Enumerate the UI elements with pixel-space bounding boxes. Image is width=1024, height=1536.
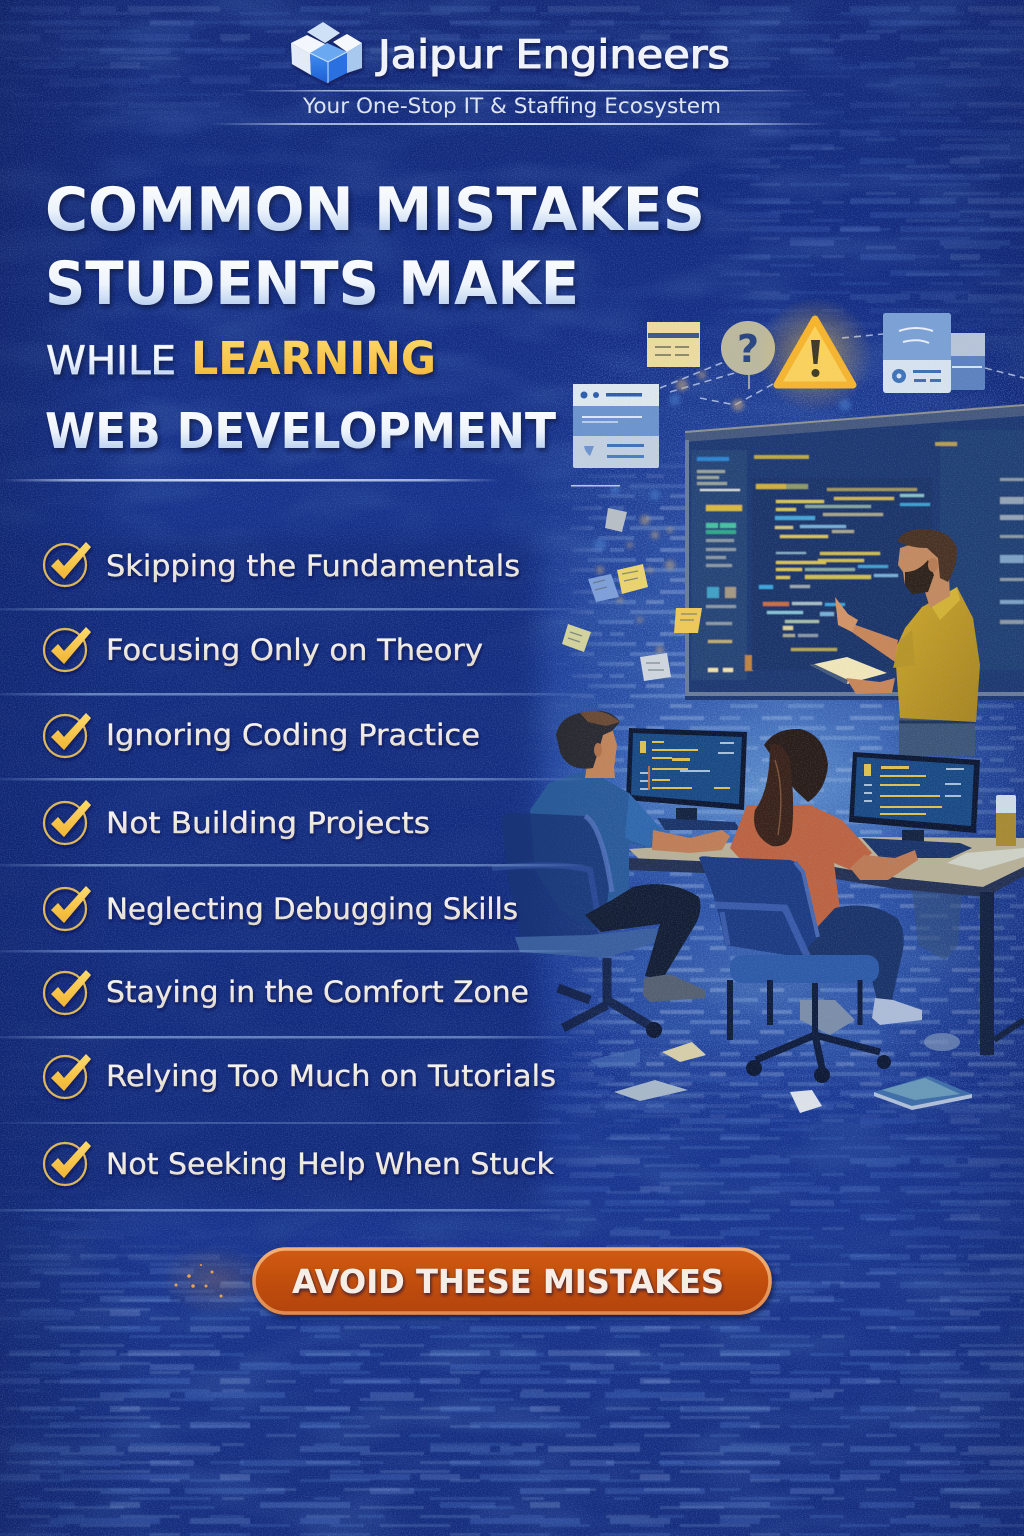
- item 7: [44, 1054, 556, 1098]
- icon: left browser window: [573, 384, 659, 468]
- chair base: [558, 958, 654, 1028]
- seat: [730, 955, 879, 983]
- seat: [515, 928, 658, 958]
- divider line top: [240, 90, 810, 92]
- item 2: Focusing Only on Theory: [106, 633, 483, 667]
- illustration: floating icons above the monitor: [571, 297, 1024, 654]
- item 3: [44, 713, 480, 757]
- item 3: Ignoring Coding Practice: [106, 718, 480, 752]
- desk top: [629, 837, 1024, 887]
- instructor tablet and hand: [810, 657, 895, 694]
- wheels: [746, 1055, 891, 1083]
- divider line bottom: [210, 123, 830, 125]
- list dividers: [0, 608, 590, 1212]
- icon: browser card: [883, 313, 951, 393]
- instructor legs: [899, 718, 975, 960]
- icon: back card: [948, 333, 985, 390]
- cup: [996, 795, 1016, 846]
- illustration: papers on floor: [590, 1033, 972, 1113]
- bokeh specks: [594, 371, 851, 654]
- orange sparkle glow: [160, 1245, 270, 1315]
- arm: [652, 830, 730, 853]
- small underline: [571, 485, 620, 486]
- desk leg: [980, 892, 994, 1055]
- icon: question bubble: [721, 321, 775, 389]
- title line 4: WEB DEVELOPMENT: [45, 403, 557, 460]
- title block: [45, 175, 705, 460]
- title divider: [0, 479, 500, 482]
- legs: [785, 906, 904, 1000]
- icon: question bubble: ?: [737, 327, 759, 371]
- monitor frame: [687, 440, 1024, 694]
- crumpled paper: [924, 1033, 960, 1051]
- illustration: instructor pointing at screen: [810, 529, 980, 960]
- illustration: female student at monitor: [699, 729, 980, 1083]
- right side panel: [935, 430, 1024, 670]
- hair and ponytail: [754, 729, 828, 846]
- head: [556, 711, 620, 778]
- connector dashed lines: [660, 334, 1024, 405]
- item 4: Not Building Projects: [106, 806, 430, 840]
- instructor shirt: [895, 587, 980, 722]
- torso: [530, 772, 662, 928]
- illustration: male student at monitor: [492, 711, 747, 1038]
- header logo and brand: [210, 22, 830, 125]
- monitor bezel top: [685, 405, 1024, 442]
- monitor: [626, 728, 747, 830]
- item 2: [44, 627, 483, 671]
- item 6: Staying in the Comfort Zone: [106, 975, 529, 1009]
- icon: sticky notes: [562, 508, 702, 681]
- legs: [585, 884, 700, 980]
- instructor arm: [840, 617, 898, 662]
- instructor head: [897, 529, 957, 608]
- tagline: Your One-Stop IT & Staffing Ecosystem: [302, 94, 721, 118]
- title line 3: learning highlight: LEARNING: [191, 332, 436, 385]
- chair back: [699, 856, 818, 957]
- desk papers: [947, 848, 1024, 870]
- arm: [850, 850, 918, 880]
- button pill: [254, 1249, 770, 1313]
- shoes: [872, 998, 922, 1025]
- illustration: desk: [629, 795, 1024, 1055]
- item 8: [44, 1141, 554, 1185]
- icon: stacked cubes logo: [291, 22, 362, 83]
- call to action button: [160, 1245, 770, 1315]
- chair back: [501, 813, 610, 955]
- icon: warning triangle: [757, 297, 873, 413]
- item 5: [44, 886, 518, 930]
- title line 3: while: WHILE: [46, 339, 176, 384]
- illustration: large code monitor: [685, 405, 1024, 700]
- item 7: Relying Too Much on Tutorials: [106, 1059, 556, 1093]
- chair legs and base: [730, 980, 880, 1068]
- torso: [730, 805, 872, 935]
- item 6: [44, 970, 529, 1014]
- mistakes list: [0, 542, 590, 1212]
- item 1: Skipping the Fundamentals: [106, 549, 520, 583]
- sidebar panel: [691, 450, 753, 680]
- button label: AVOID THESE MISTAKES: [292, 1262, 724, 1301]
- icon: yellow note card: [647, 322, 700, 367]
- item 5: Neglecting Debugging Skills: [106, 892, 518, 926]
- tablet on floor: [874, 1076, 972, 1110]
- item 1: [44, 542, 520, 586]
- illustration grain overlay: [550, 320, 1024, 1103]
- title line 2: STUDENTS MAKE: [45, 249, 579, 319]
- wheel: [646, 1022, 662, 1038]
- desk front edge: [629, 858, 1024, 897]
- shoe: [643, 974, 705, 1002]
- brand name: Jaipur Engineers: [375, 33, 730, 78]
- item 8: Not Seeking Help When Stuck: [106, 1147, 554, 1181]
- item 4: [44, 800, 430, 844]
- title line 1: COMMON MISTAKES: [45, 175, 705, 245]
- monitor: [849, 752, 980, 858]
- code panel: [752, 455, 932, 670]
